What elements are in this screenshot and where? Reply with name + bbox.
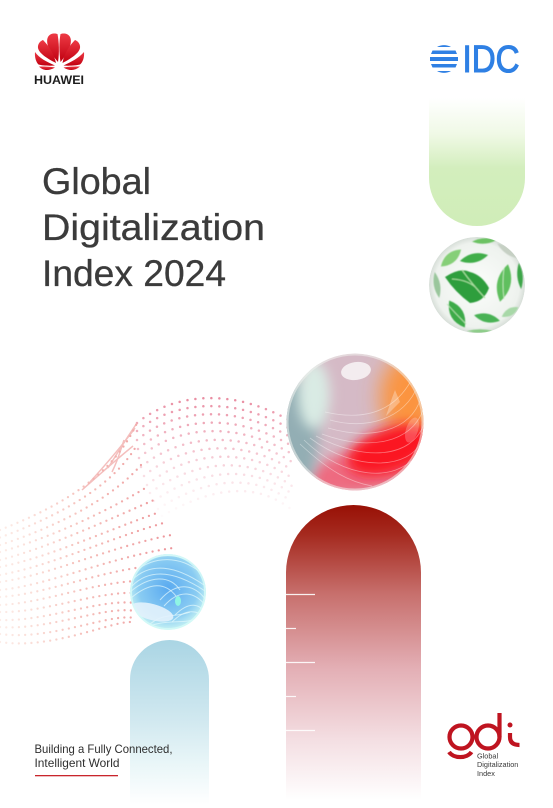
logo caption: Global Digitalization Index: Digitalization: [477, 760, 518, 769]
logo mark: IDC striped globe: [430, 45, 458, 73]
tagline: Intelligent World: [34, 757, 120, 770]
dotted wave: front sheet: [0, 423, 173, 643]
logo wordmark: Huawei: HUAWEI: [34, 75, 84, 87]
title: Index 2024: [42, 253, 226, 294]
logo: IDC: [430, 39, 520, 81]
sphere: leaves: [429, 237, 525, 333]
logo caption: Global Digitalization Index: [477, 752, 518, 778]
sphere tint: red lower right: [340, 416, 424, 484]
tagline: [34, 743, 172, 770]
sphere tint: warm upper right: [380, 354, 440, 442]
capsule: blue: [130, 640, 209, 808]
sphere tint: cool left: [286, 380, 324, 478]
logo mark: gdi letters: [449, 713, 520, 757]
logo: GDI: [449, 713, 520, 778]
title: Global: [42, 161, 151, 202]
logo mark: Huawei petals: [35, 33, 84, 70]
tagline: Building a Fully Connected,: [34, 743, 172, 756]
logo caption: Global Digitalization Index: Global: [477, 752, 498, 760]
sphere: blue: [129, 554, 206, 630]
capsule: red with scale ticks: [286, 505, 421, 808]
logo: Huawei: [34, 33, 84, 87]
dotted wave: back sheet: [137, 398, 292, 516]
dotted wave: fold ridge: [82, 423, 137, 490]
logo caption: Global Digitalization Index: Index: [477, 769, 495, 778]
logo wordmark: IDC: IDC: [462, 39, 520, 81]
sphere tint: pink transition: [310, 444, 417, 490]
tagline underline: [35, 775, 118, 776]
capsule: green: [429, 98, 525, 226]
title: [42, 161, 265, 294]
title: Digitalization: [42, 207, 265, 248]
sphere: iridescent: [286, 354, 424, 490]
